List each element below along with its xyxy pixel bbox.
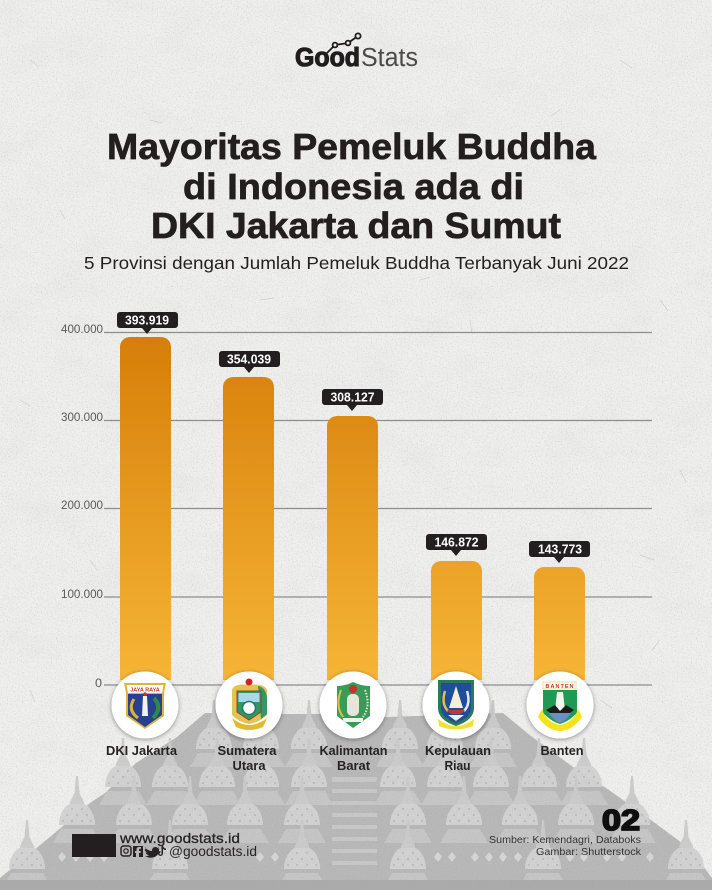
province labels: Kalimantan <box>320 743 388 758</box>
icon: DKI Jakarta emblem <box>112 672 178 738</box>
y axis gridlines and labels: 300.000 <box>61 412 103 424</box>
province labels <box>106 743 584 773</box>
icon: rising trend line <box>327 33 361 53</box>
value labels: 143.773 <box>538 542 582 556</box>
province labels: Utara <box>232 758 266 773</box>
province labels: Barat <box>337 758 371 773</box>
y axis gridlines and labels: 400.000 <box>61 324 103 336</box>
province labels: Sumatera <box>218 743 277 758</box>
province emblems <box>112 672 594 738</box>
logo: GoodStats: Stats <box>361 44 418 72</box>
value labels: 308.127 <box>330 390 375 404</box>
icon: Banten emblem: BANTEN <box>546 684 574 690</box>
footer: website and social handles: www.goodstats.id <box>119 830 240 846</box>
icon: Banten emblem <box>526 672 594 738</box>
social icons <box>121 845 166 858</box>
source credits <box>489 834 642 858</box>
value labels: 354.039 <box>227 352 271 366</box>
source credits: Gambar: Shutterstock <box>536 846 642 858</box>
value labels: 146.872 <box>434 536 479 550</box>
province labels: Kepulauan <box>425 743 491 758</box>
province labels: DKI Jakarta <box>106 743 178 758</box>
province labels: Banten <box>540 743 584 758</box>
icon: Kalimantan Barat emblem <box>320 672 386 738</box>
y axis gridlines and labels: 0 <box>95 678 102 690</box>
subtitle: 5 Provinsi dengan Jumlah Pemeluk Buddha Terbanyak Juni 2022 <box>84 253 629 273</box>
y axis gridlines and labels <box>61 324 652 690</box>
source credits: Sumber: Kemendagri, Databoks <box>489 834 641 846</box>
bar chart <box>61 312 652 690</box>
logo: GoodStats: Good <box>295 44 360 72</box>
bars <box>120 337 585 680</box>
icon: Sumatera Utara emblem <box>216 672 282 738</box>
icon: Kepulauan Riau emblem <box>422 672 490 738</box>
value labels <box>117 312 590 563</box>
y axis gridlines and labels: 200.000 <box>61 500 103 512</box>
value labels: 393.919 <box>125 314 169 328</box>
title: di Indonesia ada di <box>183 166 524 207</box>
footer: website and social handles: @goodstats.id <box>169 843 257 859</box>
title: Mayoritas Pemeluk Buddha <box>107 126 597 167</box>
page number: 02 <box>602 805 640 837</box>
title: DKI Jakarta dan Sumut <box>151 205 561 246</box>
province labels: Riau <box>444 758 470 773</box>
footer: website and social handles <box>72 830 257 859</box>
icon: DKI Jakarta emblem: JAYA RAYA <box>130 688 160 694</box>
y axis gridlines and labels: 100.000 <box>61 589 103 601</box>
logo: GoodStats <box>295 33 418 72</box>
temple silhouette illustration <box>0 700 712 890</box>
title <box>107 126 597 246</box>
